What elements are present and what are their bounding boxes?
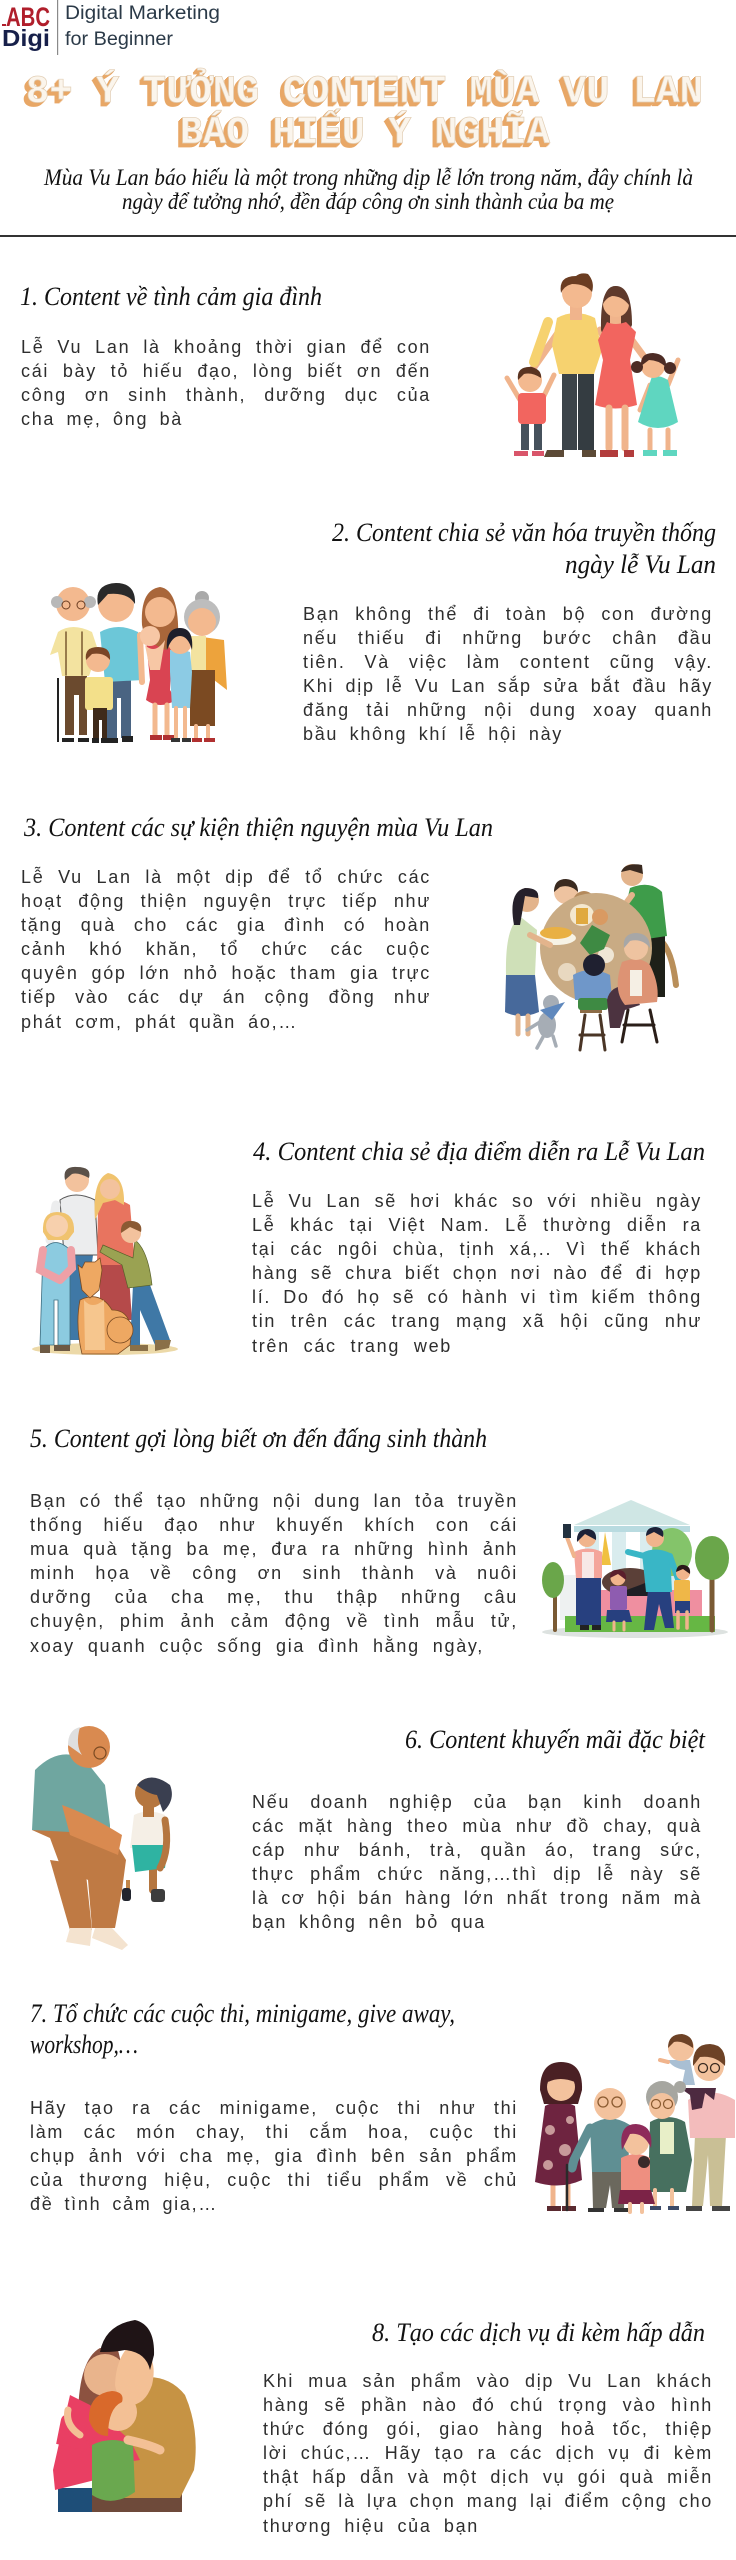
body text 6: các mặt hàng theo mùa như đồ chay, quà	[252, 1816, 702, 1836]
body text 8: hàng sẽ phần nào đó chú trọng vào hình	[263, 2395, 713, 2415]
body text 8	[263, 2371, 713, 2536]
panel: section 4	[32, 1137, 705, 1356]
title: BÁO HIẾU Ý NGHĨA	[180, 108, 551, 155]
illustration: extended family	[535, 2034, 735, 2212]
body text 4: Lễ khác tại Việt Nam. Lễ thường diễn ra	[252, 1215, 702, 1235]
body text 6	[252, 1792, 702, 1932]
body text 5: mua quà tặng ba mẹ, đưa ra những hình ảnh	[30, 1539, 518, 1559]
body text 3: cảnh khó khăn, tổ chức các cuộc	[21, 939, 431, 959]
panel: section 2	[50, 518, 716, 744]
body text 6: cáp như bánh, trà, quần áo, trang sức,	[252, 1840, 702, 1860]
body text 8: thật hấp dẫn và một dịch vụ gói quà miễn	[263, 2467, 713, 2487]
body text 7: chụp ảnh với cha mẹ, gia đình bên sản phẩm	[30, 2146, 518, 2166]
body text 2: đăng tải những nội dung xoay quanh	[303, 700, 713, 720]
body text 3: phát cơm, phát quần áo,…	[21, 1012, 298, 1032]
intro text: Mùa Vu Lan báo hiếu là một trong những dịp lễ lớn trong năm, đây chính là	[43, 165, 693, 190]
panel: section 1	[20, 273, 680, 457]
body text 4: tin trên các trang mạng xã hội cũng như	[252, 1311, 702, 1331]
panel: section 5	[30, 1424, 729, 1656]
body text 5: Bạn có thể tạo những nội dung lan tỏa truyền	[30, 1491, 518, 1511]
body text 4: Lễ Vu Lan sẽ hơi khác so với nhiều ngày	[252, 1191, 702, 1211]
logo tagline	[65, 3, 220, 50]
body text 5: minh họa về công ơn sinh thành và nuôi	[30, 1563, 518, 1583]
heading 6: 6. Content khuyến mãi đặc biệt	[405, 1725, 706, 1754]
title: 8+ Ý TƯỞNG CONTENT MÙA VU LAN	[26, 68, 703, 114]
body text 2: Khi dịp lễ Vu Lan sắp sửa bắt đầu hãy	[303, 676, 713, 696]
heading 8: 8. Tạo các dịch vụ đi kèm hấp dẫn	[372, 2318, 705, 2347]
heading 1: 1. Content về tình cảm gia đình	[20, 282, 322, 311]
heading 2: ngày lễ Vu Lan	[565, 550, 716, 579]
heading 4: 4. Content chia sẻ địa điểm diễn ra Lễ Vu Lan	[253, 1137, 705, 1166]
logo tagline: Digital Marketing	[65, 3, 220, 24]
body text 6: bạn không nên bỏ qua	[252, 1912, 486, 1932]
body text 1: công ơn sinh thành, dưỡng dục của	[21, 385, 431, 405]
title	[24, 68, 703, 155]
body text 4	[252, 1190, 702, 1356]
body text 7: Hãy tạo ra các minigame, cuộc thi như thi	[30, 2098, 518, 2118]
body text 3: quyên góp lớn nhỏ hoặc tham gia trực	[21, 963, 431, 983]
logo mark ABC Digi: Digi	[2, 25, 50, 51]
body text 1	[21, 336, 431, 429]
logo tagline: for Beginner	[65, 29, 174, 50]
illustration: grandfather and grandson	[32, 1726, 172, 1950]
heading 2	[332, 518, 716, 579]
body text 5: dưỡng của cha mẹ, thu thập những câu	[30, 1587, 518, 1607]
body text 7	[30, 2098, 518, 2214]
body text 5: thống hiếu đạo như khuyến khích con cái	[30, 1515, 518, 1535]
body text 2: tiên. Và việc làm content cũng vậy.	[303, 652, 713, 672]
body text 5	[30, 1491, 518, 1656]
body text 4: tại các ngôi chùa, tịnh xá,.. Vì thế khách	[252, 1239, 702, 1259]
body text 1: cái bày tỏ hiếu đạo, lòng biết ơn đến	[21, 361, 431, 381]
body text 8: phí sẽ là lựa chọn mang lại điểm cộng cho	[263, 2491, 713, 2511]
illustration: three-generation family	[50, 583, 227, 743]
heading 7: 7. Tổ chức các cuộc thi, minigame, give away,	[30, 1999, 455, 2028]
body text 4: trên các trang web	[252, 1336, 452, 1356]
panel: section 6	[32, 1725, 706, 1950]
illustration: family hug	[53, 2320, 196, 2512]
body text 3: Lễ Vu Lan là một dịp để tổ chức các	[21, 867, 431, 887]
heading 2: 2. Content chia sẻ văn hóa truyền thống	[332, 518, 716, 547]
panel: section 7	[30, 1999, 735, 2214]
body text 7: đề tình cảm gia,…	[30, 2194, 218, 2214]
body text 5: chuyện, phim ảnh cảm động về tình mẫu tử,	[30, 1611, 518, 1631]
body text 8: Khi mua sản phẩm vào dịp Vu Lan khách	[263, 2371, 713, 2391]
panel: section 8	[53, 2318, 713, 2536]
heading 7: workshop,…	[30, 2030, 138, 2059]
body text 7: của thương hiệu, cuộc thi tiểu phẩm về chủ	[30, 2170, 518, 2190]
body text 8: lời chúc,… Hãy tạo ra các dịch vụ đi kèm	[263, 2443, 713, 2463]
body text 2: bầu không khí lễ hội này	[303, 724, 563, 744]
body text 3	[21, 866, 431, 1032]
body text 2	[303, 604, 713, 744]
illustration: family around a table	[505, 864, 676, 1050]
logo mark ABC Digi: ABC	[6, 2, 50, 32]
heading 3: 3. Content các sự kiện thiện nguyện mùa Vu Lan	[23, 813, 493, 842]
illustration: family of four	[507, 273, 678, 457]
body text 2: Bạn không thể đi toàn bộ con đường	[303, 604, 713, 624]
body text 2: nếu thiếu đi những bước chân đầu	[303, 628, 713, 648]
intro text: ngày để tưởng nhớ, đền đáp công ơn sinh thành của ba mẹ	[122, 189, 614, 214]
panel: section 3	[21, 813, 679, 1052]
illustration: family with dog	[32, 1167, 178, 1355]
body text 8: thương hiệu của bạn	[263, 2516, 479, 2536]
logo mark ABC Digi	[2, 2, 50, 51]
heading 7	[30, 1999, 455, 2059]
body text 6: là cơ hội bán hàng lớn nhất trong năm mà	[252, 1888, 702, 1908]
body text 7: làm các món chay, thi cắm hoa, cuộc thi	[30, 2122, 518, 2142]
body text 3: tiếp vào các dự án cộng đồng như	[21, 987, 431, 1007]
illustration: family at school building	[542, 1500, 729, 1638]
intro text	[43, 165, 693, 214]
body text 4: hàng sẽ chưa biết chọn nơi nào để đi hợp	[252, 1263, 702, 1283]
body text 1: Lễ Vu Lan là khoảng thời gian để con	[21, 337, 431, 357]
body text 4: lí. Do đó họ sẽ có hành vi tìm kiếm thông	[252, 1287, 702, 1307]
heading 5: 5. Content gợi lòng biết ơn đến đấng sinh thành	[30, 1424, 487, 1453]
body text 3: hoạt động thiện nguyện trực tiếp như	[21, 891, 431, 911]
body text 5: xoay quanh cuộc sống gia đình hằng ngày,	[30, 1636, 484, 1656]
body text 3: tặng quà cho các gia đình có hoàn	[21, 915, 431, 935]
body text 6: thực phẩm chức năng,…thì dịp lễ này sẽ	[252, 1864, 702, 1884]
body text 8: thức đóng gói, giao hàng hoả tốc, thiệp	[263, 2419, 713, 2439]
body text 1: cha mẹ, ông bà	[21, 409, 183, 429]
body text 6: Nếu doanh nghiệp của bạn kinh doanh	[252, 1792, 702, 1812]
header logo	[2, 0, 220, 55]
